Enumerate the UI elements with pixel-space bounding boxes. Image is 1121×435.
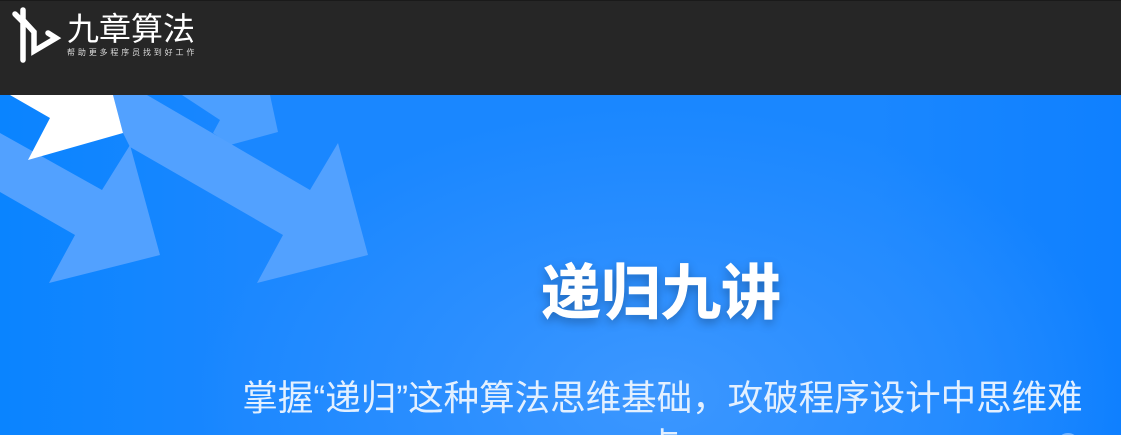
arrow: lower left <box>0 133 160 283</box>
logo tagline: 帮助更多程序员找到好工作 <box>67 48 197 57</box>
corner glint <box>1060 433 1076 435</box>
decorative arrows <box>0 95 1074 435</box>
subtitle: 掌握“递归”这种算法思维基础，攻破程序设计中思维难 <box>242 378 1083 418</box>
title: 递归九讲 <box>541 260 781 327</box>
arrow: large centre <box>113 95 368 283</box>
arrow: white <box>10 95 123 160</box>
header bar <box>0 0 1121 95</box>
hero background <box>0 95 1121 435</box>
logo wordmark: 九章算法 <box>67 11 195 47</box>
logo mark <box>12 7 62 63</box>
arrow: top small <box>182 95 278 145</box>
